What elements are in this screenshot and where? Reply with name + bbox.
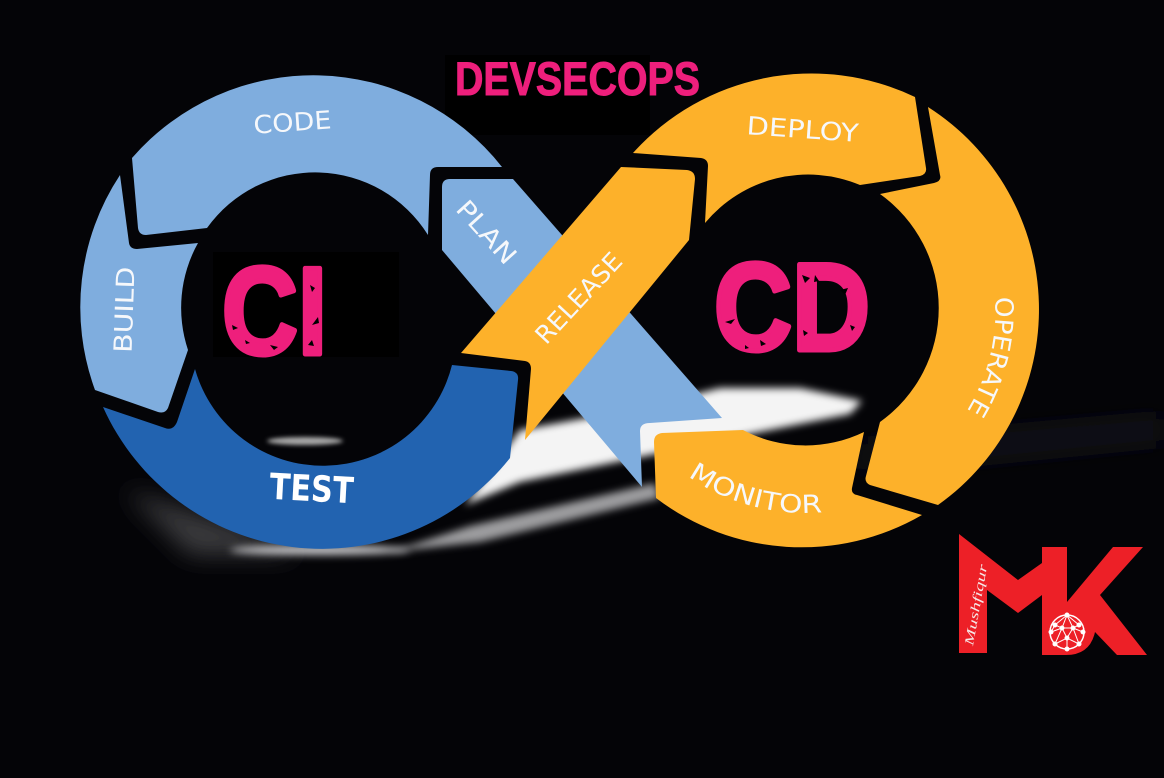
panel: CD loop: [461, 74, 1039, 547]
release arrow: [461, 167, 695, 440]
stage labels: [109, 105, 1014, 550]
label: monitor: MONITOR: [690, 462, 822, 513]
title: DEVSECOPS: [455, 52, 700, 105]
build arrow: [80, 175, 198, 412]
label: plan: PLAN: [450, 194, 523, 270]
monitor arrow: [654, 430, 922, 547]
heading: CD: CD: [714, 239, 870, 377]
label: build: BUILD: [109, 266, 140, 353]
logo: MK: [959, 534, 1147, 655]
label: test: TEST: [269, 467, 355, 512]
code arrow: [132, 75, 502, 235]
operate arrow: [866, 107, 1039, 505]
deploy arrow: [633, 74, 926, 223]
label: operate: OPERATE: [968, 298, 1014, 418]
label: code: CODE: [252, 105, 332, 140]
icon: network globe: [1049, 613, 1085, 651]
label: release: RELEASE: [529, 247, 628, 350]
plan arrow: [442, 179, 722, 487]
panel: CI loop: [80, 75, 722, 549]
logo signature: Mushfiqur: [961, 562, 990, 648]
test arrow: [103, 365, 518, 549]
logo letterform: [959, 534, 1147, 655]
white light streak: [230, 388, 862, 555]
label: deploy: DEPLOY: [746, 111, 860, 148]
heading: CI: CI: [222, 243, 327, 381]
